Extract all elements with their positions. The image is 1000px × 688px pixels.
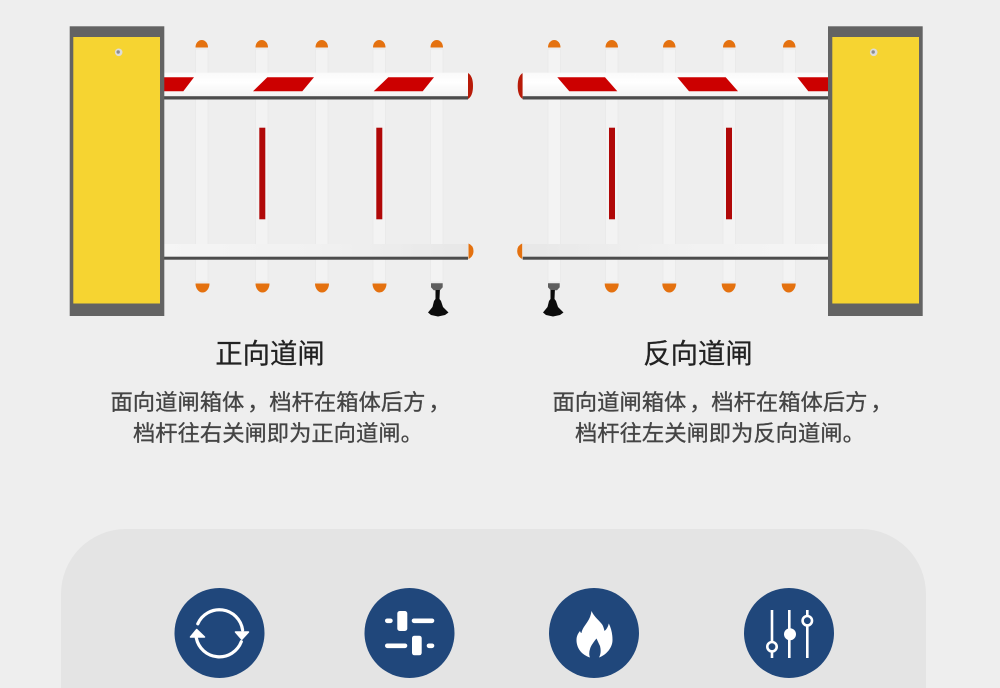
description: reverse gate: ， — [689, 390, 712, 415]
description: forward gate: ， — [247, 390, 270, 415]
cabinet — [70, 26, 164, 316]
description: reverse gate: 面向道闸箱体 档杆在箱体后方 — [552, 390, 867, 415]
icon: flame — [549, 588, 639, 678]
fence posts — [548, 49, 796, 282]
cabinet — [828, 26, 923, 316]
description: reverse gate — [552, 390, 893, 446]
icon: rotation — [174, 588, 264, 678]
top arm — [164, 73, 473, 100]
bottom arm — [164, 244, 474, 260]
red reflectors — [259, 128, 382, 219]
top caps — [548, 40, 796, 48]
description: reverse gate: 档杆往左关闸即为反向道闸。 — [575, 421, 865, 446]
description: forward gate: 面向道闸箱体 档杆在箱体后方 — [110, 390, 425, 415]
bottom caps — [605, 284, 796, 292]
description: forward gate: 档杆往右关闸即为正向道闸。 — [133, 421, 423, 446]
red reflectors — [609, 128, 732, 219]
description: forward gate: ， — [428, 390, 451, 415]
fence posts — [196, 49, 443, 282]
forward barrier gate — [70, 26, 473, 317]
top caps — [196, 40, 443, 48]
heading: reverse gate: 反向道闸 — [643, 338, 753, 369]
icon: adjustment sliders — [364, 588, 454, 678]
support foot — [428, 283, 448, 316]
description: reverse gate: ， — [870, 390, 893, 415]
reverse barrier gate — [517, 26, 923, 317]
support foot — [543, 283, 564, 316]
bottom arm — [517, 244, 828, 260]
top arm — [518, 73, 828, 100]
bottom caps — [196, 284, 386, 292]
heading: forward gate: 正向道闸 — [215, 338, 325, 369]
icon: mixer sliders — [744, 588, 834, 678]
feature panel — [61, 529, 926, 688]
description: forward gate — [110, 390, 451, 446]
